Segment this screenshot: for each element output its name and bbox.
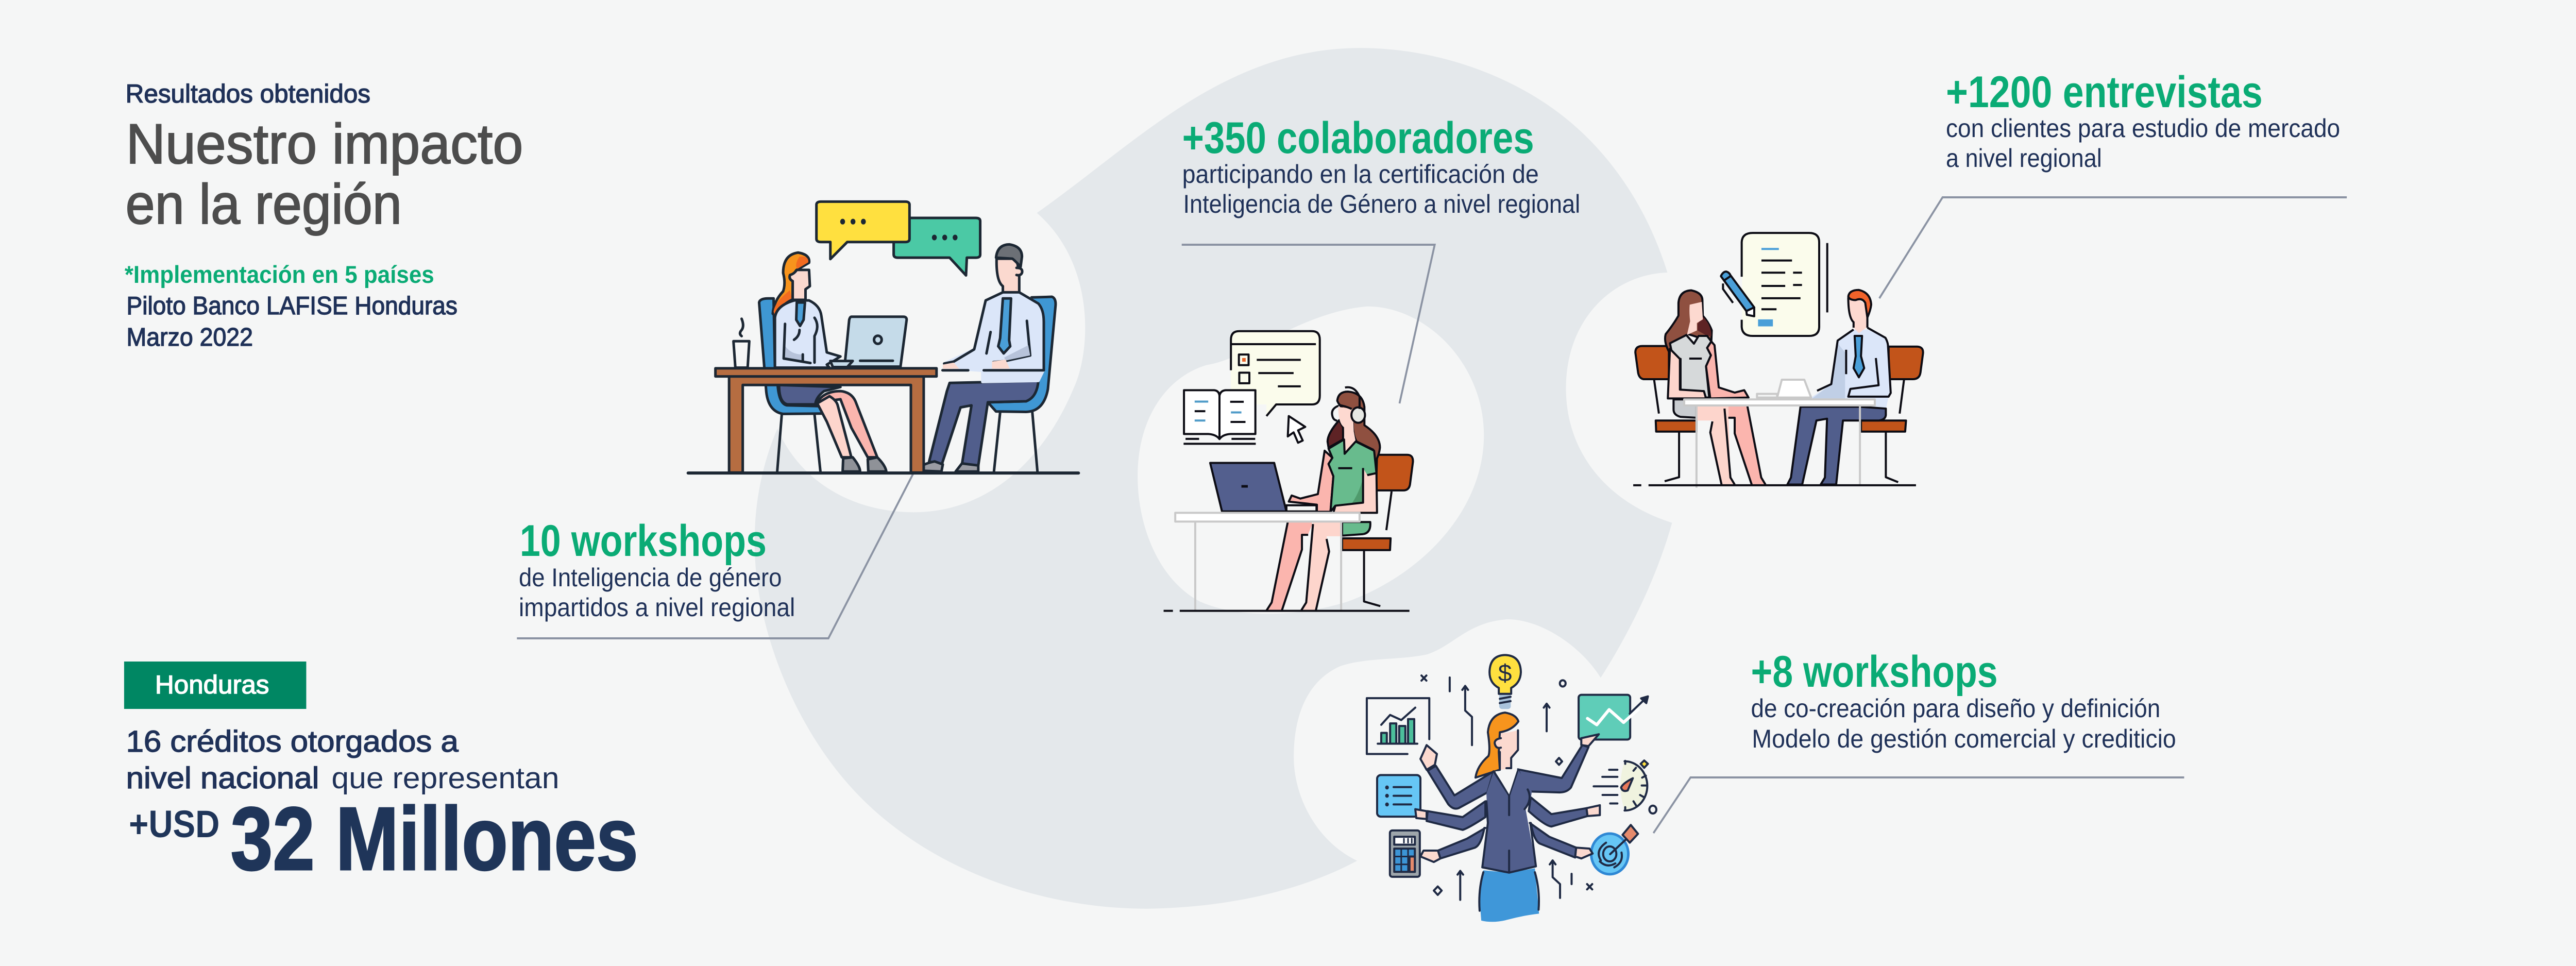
laptop — [831, 317, 907, 367]
legs — [1266, 522, 1370, 611]
jacket — [1482, 769, 1536, 873]
icon: bar chart board — [1367, 698, 1429, 754]
callout: 8 workshops: de co-creación para diseño y definición — [1751, 694, 2160, 723]
illustration: multitasking woman with icons — [1367, 655, 1656, 922]
woman's chair — [759, 298, 827, 472]
Honduras results block — [124, 662, 638, 889]
woman — [1289, 387, 1380, 513]
book — [1183, 390, 1256, 444]
callout: 10 workshops — [519, 516, 795, 622]
icon: stopwatch — [1594, 760, 1648, 810]
icon: target and arrow — [1591, 825, 1638, 874]
chair — [1342, 455, 1413, 606]
credits text: nivel nacional — [126, 761, 319, 794]
credits text: que representan — [331, 761, 559, 794]
pilot text: Marzo 2022 — [127, 323, 253, 351]
man — [918, 244, 1044, 471]
amount: 32 Millones — [231, 789, 638, 889]
pilot text: Piloto Banco LAFISE Honduras — [127, 291, 457, 319]
icon: calculator — [1390, 831, 1420, 877]
eyebrow: resultados: Resultados obtenidos — [126, 79, 370, 108]
laptop — [1210, 463, 1316, 512]
man's chair — [988, 297, 1056, 472]
desk — [1175, 513, 1360, 610]
cursor icon — [1288, 416, 1305, 443]
callout: 350 colaboradores: Inteligencia de Género a nivel regional — [1183, 190, 1580, 218]
multitasking woman — [1415, 713, 1600, 922]
Honduras badge — [124, 662, 306, 709]
illustration: interview with document — [1633, 233, 1923, 488]
hands — [1415, 734, 1600, 862]
man — [1787, 290, 1891, 485]
icon: rising chart card — [1579, 695, 1648, 740]
callout: 1200 entrevistas: a nivel regional — [1946, 144, 2102, 173]
background blob — [755, 48, 1672, 909]
credits text — [126, 724, 559, 794]
speech bubbles — [817, 201, 980, 276]
amount: +USD — [129, 804, 219, 846]
callout: 1200 entrevistas: +1200 entrevistas — [1946, 67, 2263, 117]
title — [126, 112, 523, 236]
illustration: woman at laptop with headset — [1164, 331, 1413, 611]
callout: 10 workshops: 10 workshops — [520, 516, 767, 566]
icon: list card — [1377, 775, 1420, 817]
floor line — [1633, 484, 1916, 486]
woman — [1665, 291, 1766, 485]
skirt outline — [1479, 872, 1539, 911]
table and tablet — [1684, 380, 1875, 488]
callout: 8 workshops — [1751, 647, 2176, 753]
icon: idea bulb — [1489, 655, 1521, 709]
callout: 8 workshops: +8 workshops — [1751, 647, 1998, 697]
pilot text — [127, 291, 457, 351]
icon: idea bulb: $ — [1498, 659, 1512, 686]
title: en la región — [126, 173, 402, 236]
implementation note: *Implementación en 5 países — [125, 261, 434, 288]
callout: 8 workshops: Modelo de gestión comercial y crediticio — [1752, 724, 2176, 753]
callout: 1200 entrevistas: con clientes para estudio de mercado — [1946, 114, 2340, 143]
skirt — [1479, 868, 1539, 922]
callout: 10 workshops: impartidos a nivel regional — [519, 593, 795, 622]
floor line — [1164, 610, 1410, 612]
Honduras badge: Honduras — [155, 670, 269, 699]
credits text: 16 créditos otorgados a — [126, 724, 459, 758]
face — [1500, 731, 1518, 770]
leader line: 10 workshops — [517, 474, 913, 638]
title: Nuestro impacto — [126, 112, 523, 176]
chairs — [1635, 346, 1923, 482]
document — [1742, 233, 1827, 336]
floor line — [688, 471, 1078, 474]
woman — [773, 252, 886, 471]
callout: 350 colaboradores: +350 colaboradores — [1182, 113, 1534, 163]
hair — [1476, 713, 1518, 777]
desk and coffee cup — [716, 319, 937, 472]
callout: 350 colaboradores — [1182, 113, 1580, 218]
leader line: 8 workshops — [1653, 777, 2184, 833]
decorative marks — [1421, 675, 1656, 900]
leader line: 350 colaboradores — [1182, 245, 1435, 403]
form window — [1231, 331, 1320, 416]
header block — [125, 79, 523, 351]
pen — [1721, 272, 1754, 316]
callout: 10 workshops: de Inteligencia de género — [519, 563, 782, 592]
callout: 1200 entrevistas — [1946, 67, 2340, 173]
arms — [1518, 745, 1588, 792]
callout: 350 colaboradores: participando en la certificación de — [1182, 160, 1539, 189]
illustration: two people talking at desk — [688, 201, 1078, 473]
leader line: 1200 entrevistas — [1879, 197, 2347, 298]
